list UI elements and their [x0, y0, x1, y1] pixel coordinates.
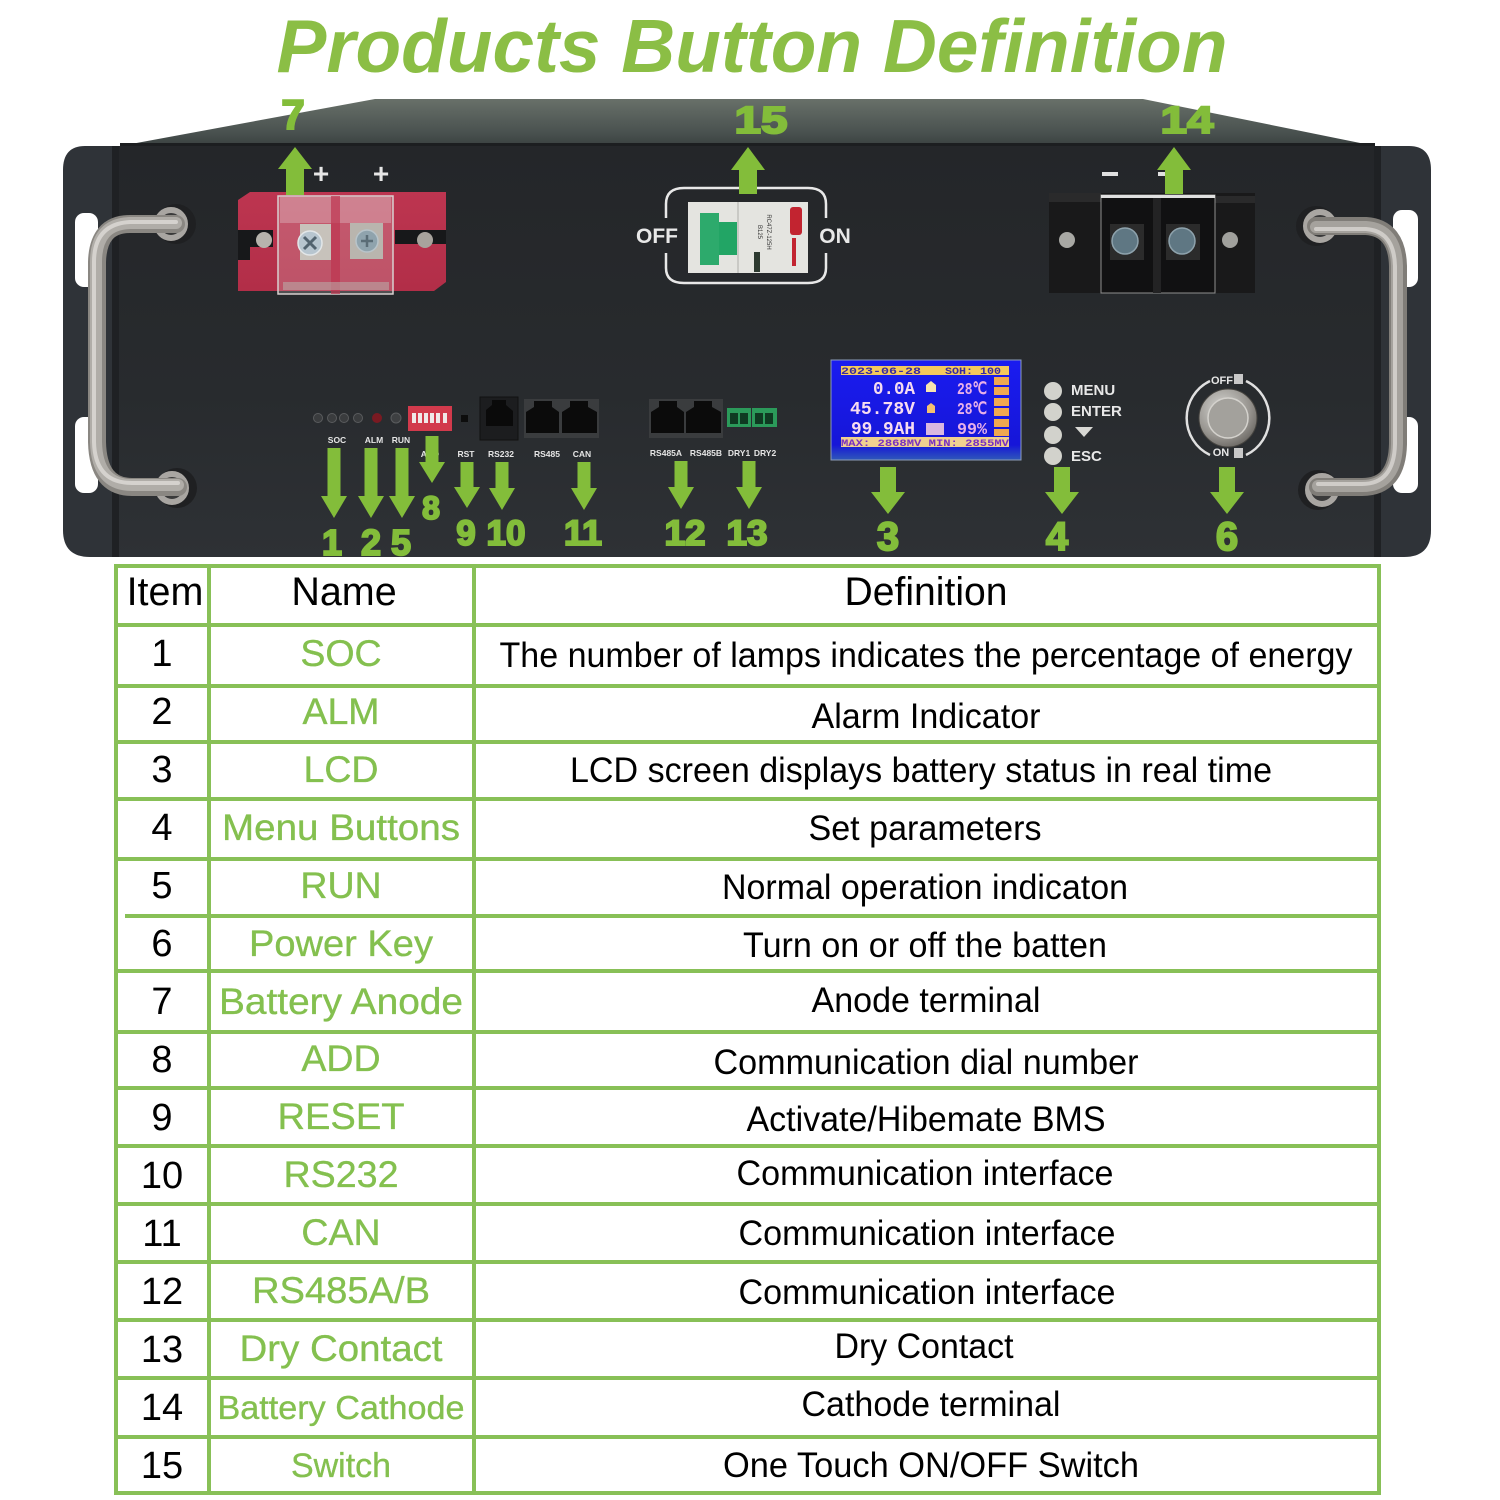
row 3: LCD: [303, 748, 379, 790]
row 15: One Touch ON/OFF Switch: [723, 1446, 1139, 1485]
port labels: CAN: [573, 449, 591, 459]
row 7: Battery Anode: [219, 980, 463, 1022]
port labels: RS485B: [690, 448, 722, 458]
port labels: DRY1: [728, 448, 750, 458]
LCD screen: 28℃: [957, 401, 987, 420]
row 11: Communication interface: [738, 1214, 1116, 1253]
row 1: The number of lamps indicates the percentage of energy: [500, 636, 1353, 675]
row 15: 15: [141, 1445, 183, 1487]
menu buttons: MENU: [1071, 382, 1115, 399]
title: Products Button Definition: [276, 4, 1228, 88]
row 11: [142, 1211, 1116, 1255]
LCD screen: 0.0A: [873, 380, 915, 400]
arrow 11: [571, 462, 597, 510]
row 5: 5: [151, 865, 173, 907]
port labels: RS485: [534, 449, 560, 459]
row 13: Dry Contact: [240, 1327, 443, 1369]
row 6: Turn on or off the batten: [743, 926, 1107, 965]
callout numbers: 9: [456, 514, 476, 553]
port labels: ADD: [421, 449, 439, 459]
power key: OFF: [1211, 375, 1233, 387]
row 8: Communication dial number: [714, 1043, 1139, 1082]
port labels: [328, 435, 776, 459]
port labels: SOC: [328, 435, 346, 445]
callout numbers: 12: [664, 514, 706, 553]
row 4: Set parameters: [808, 809, 1042, 848]
row 7: 7: [151, 981, 173, 1023]
LCD screen: SOH: 100: [945, 367, 1001, 378]
communication ports: [480, 397, 777, 440]
row 13: 13: [141, 1329, 183, 1371]
callout numbers: 14: [1160, 100, 1214, 142]
row 15: Switch: [291, 1447, 391, 1485]
right handle: [1296, 206, 1398, 510]
row 10: [141, 1153, 1114, 1197]
battery top face: [120, 99, 1375, 146]
row 11: CAN: [301, 1211, 381, 1253]
ON label: ON: [819, 225, 851, 248]
arrow 6: [1210, 467, 1244, 514]
callout numbers: 5: [391, 522, 411, 563]
row 2: 2: [151, 691, 173, 733]
row 4: Menu Buttons: [222, 806, 460, 848]
row 14: 14: [141, 1387, 183, 1429]
callout arrows: [278, 147, 1244, 518]
row 2: [151, 690, 1041, 736]
callout numbers: 3: [877, 515, 899, 559]
LCD screen: [831, 360, 1021, 460]
row 5: Normal operation indicaton: [722, 868, 1128, 907]
positive terminal block: +: [373, 158, 389, 189]
arrow 3: [871, 467, 905, 514]
callout numbers: 1: [322, 522, 342, 563]
power key: [1187, 374, 1269, 459]
circuit breaker switch: B125: [756, 225, 762, 240]
row 9: RESET: [278, 1095, 405, 1137]
LCD screen: 28℃: [957, 381, 987, 400]
arrow 1: [321, 448, 347, 518]
LCD screen: 99%: [957, 421, 988, 440]
menu buttons: ESC: [1071, 448, 1102, 465]
arrow 10: [489, 462, 515, 510]
row 15: [141, 1445, 1139, 1487]
row 4: 4: [151, 807, 173, 849]
arrow 15: [731, 147, 765, 194]
battery module photo illustration: [63, 99, 1431, 557]
port labels: RST: [458, 449, 475, 459]
row 13: [141, 1327, 1014, 1371]
row 9: [151, 1095, 1106, 1139]
LCD screen: 2023-06-28: [841, 367, 921, 378]
power key: ON: [1213, 447, 1229, 459]
row 4: [151, 806, 1042, 849]
row 3: LCD screen displays battery status in real time: [570, 751, 1272, 790]
row 7: [151, 980, 1040, 1023]
row 14: Battery Cathode: [218, 1389, 464, 1426]
table header: Item: [127, 570, 203, 614]
status LEDs and DIP switch: [314, 406, 468, 431]
row 7: Anode terminal: [812, 981, 1040, 1020]
callout numbers: 13: [726, 514, 768, 553]
table grid: [116, 566, 1379, 1493]
callout numbers: 6: [1216, 515, 1238, 559]
circuit breaker switch: RC47Z-125H: [765, 214, 771, 250]
row 13: Dry Contact: [834, 1327, 1014, 1366]
port labels: RS485A: [650, 448, 682, 458]
row 6: 6: [151, 923, 173, 965]
LCD screen: 99.9AH: [851, 420, 915, 440]
row 1: [151, 632, 1353, 675]
table header: [127, 570, 1008, 614]
arrow 2: [358, 448, 384, 518]
negative terminal block: [1049, 172, 1255, 293]
callout numbers: [281, 91, 1238, 563]
callout numbers: 11: [564, 514, 602, 553]
handle slots: [75, 210, 1418, 493]
row 2: Alarm Indicator: [812, 697, 1041, 736]
callout numbers: 2: [361, 522, 381, 563]
row 10: 10: [141, 1155, 183, 1197]
row 12: RS485A/B: [252, 1269, 430, 1311]
row 2: ALM: [302, 690, 380, 732]
arrow 12: [668, 461, 694, 509]
table header: Definition: [844, 570, 1008, 614]
port labels: RS232: [488, 449, 514, 459]
callout numbers: 8: [422, 490, 440, 526]
arrow 5: [389, 448, 415, 518]
row 6: Power Key: [249, 922, 433, 964]
row 14: [141, 1385, 1060, 1429]
battery front panel: [63, 146, 1431, 557]
port labels: DRY2: [754, 448, 776, 458]
arrow 14: [1157, 147, 1191, 194]
port labels: RUN: [392, 435, 410, 445]
row 8: ADD: [301, 1037, 381, 1079]
port labels: ALM: [365, 435, 383, 445]
row 6: [151, 922, 1107, 965]
menu buttons: ENTER: [1071, 403, 1122, 420]
row 8: 8: [151, 1039, 173, 1081]
row 12: 12: [141, 1271, 183, 1313]
minus symbols: [1102, 172, 1118, 176]
menu buttons: [1044, 382, 1122, 465]
table header: Name: [291, 570, 397, 614]
row 5: RUN: [300, 864, 382, 906]
callout numbers: 15: [734, 100, 788, 142]
positive terminal block: [238, 158, 446, 294]
arrow 9: [454, 462, 480, 508]
row 1: SOC: [300, 632, 382, 674]
row 10: Communication interface: [736, 1154, 1114, 1193]
row 9: Activate/Hibemate BMS: [746, 1100, 1106, 1139]
row 11: 11: [142, 1213, 182, 1255]
row 3: [151, 748, 1272, 791]
OFF label: OFF: [636, 225, 678, 248]
row 8: [151, 1037, 1139, 1082]
plus symbols: +: [313, 158, 329, 189]
row 5: [151, 864, 1128, 907]
LCD screen: 45.78V: [850, 400, 915, 420]
arrow 4: [1045, 467, 1079, 514]
arrow 13: [736, 461, 762, 509]
row 3: 3: [151, 749, 173, 791]
arrow 7: [278, 147, 312, 195]
left handle: [94, 204, 197, 508]
circuit breaker switch: [636, 188, 851, 283]
row 9: 9: [151, 1097, 173, 1139]
row 1: 1: [151, 633, 173, 675]
row 12: Communication interface: [738, 1273, 1116, 1312]
LCD screen: MAX: 2868MV MIN: 2855MV: [841, 439, 1009, 450]
row 10: RS232: [284, 1153, 398, 1195]
definition table: [116, 566, 1379, 1493]
arrow 8: [419, 436, 445, 483]
row 14: Cathode terminal: [802, 1385, 1060, 1424]
callout numbers: 10: [487, 514, 525, 553]
row 12: [141, 1269, 1116, 1313]
callout numbers: 4: [1046, 515, 1069, 559]
callout numbers: 7: [281, 91, 305, 138]
